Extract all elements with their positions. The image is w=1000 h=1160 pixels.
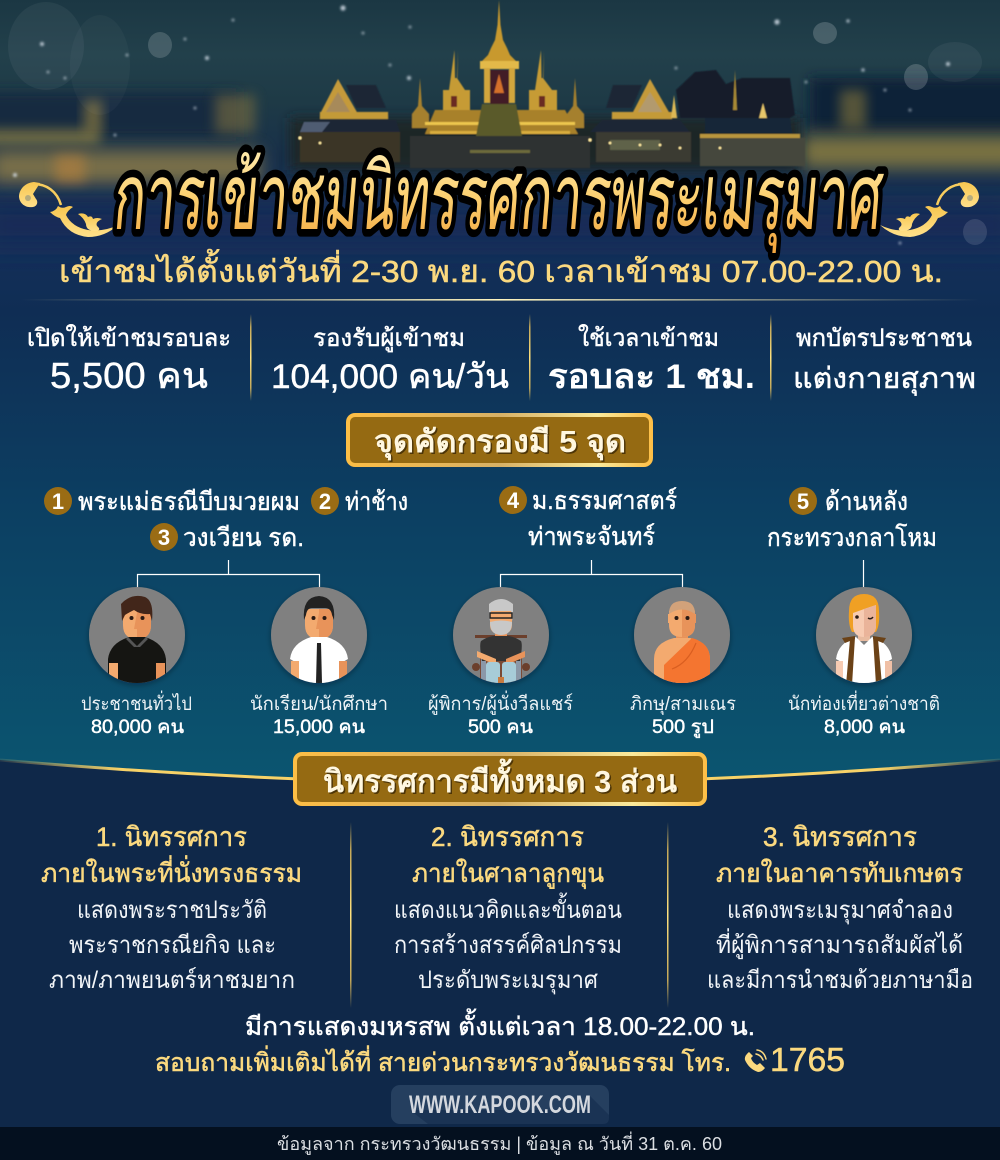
panel: exhibition 1: แสดงพระราชประวัติ	[77, 897, 267, 924]
hotline text: สอบถามเพิ่มเติมได้ที่ สายด่วนกระทรวงวัฒนธรรม โทร.	[155, 1045, 731, 1077]
point 1: 1	[52, 489, 64, 514]
panel: exhibition 2: การสร้างสรรค์ศิลปกรรม	[394, 931, 622, 959]
hotline number: 1765	[770, 1041, 845, 1078]
label: general public: 80,000 คน	[91, 717, 184, 738]
point 4: ม.ธรรมศาสตร์	[532, 487, 677, 515]
person: general public	[89, 587, 185, 685]
blurred riverside glow	[0, 78, 1000, 245]
person: wheelchair user	[453, 587, 549, 685]
point 4: ท่าพระจันทร์	[528, 523, 655, 551]
point 1: พระแม่ธรณีบีบมวยผม	[78, 488, 300, 516]
main spire	[480, 0, 519, 104]
stepped base	[425, 110, 578, 134]
person: monk	[634, 587, 730, 685]
fact: duration: รอบละ 1 ชม.	[548, 358, 755, 396]
lower lights	[298, 136, 721, 149]
footer bar: ข้อมูลจาก กระทรวงวัฒนธรรม | ข้อมูล ณ วันที่ 31 ต.ค. 60	[277, 1131, 722, 1155]
label: monks: 500 รูป	[652, 717, 714, 738]
fact: daily capacity: 104,000 คน/วัน	[271, 358, 509, 396]
right tiered roofs	[676, 70, 795, 118]
connector lines	[138, 560, 864, 587]
label: general public	[81, 690, 192, 738]
panel: exhibition 1: 1. นิทรรศการ	[96, 822, 247, 852]
right hall	[632, 79, 670, 114]
fact: duration	[548, 324, 755, 396]
point 2	[311, 487, 408, 516]
label: students: 15,000 คน	[273, 717, 365, 738]
point 3: วงเวียน รด.	[183, 524, 304, 552]
badge: 5 screening points: จุดคัดกรองมี 5 จุด	[376, 426, 628, 462]
label: monks: ภิกษุ/สามเณร	[630, 694, 736, 716]
divider: header rule	[20, 299, 980, 301]
panel: exhibition 1: พระราชกรณียกิจ และ	[69, 932, 276, 959]
bokeh circles and sparkles	[8, 2, 987, 245]
person: foreign tourist	[816, 587, 912, 685]
panel: exhibition 3: และมีการนำชมด้วยภาษามือ	[707, 967, 973, 994]
icon: telephone	[745, 1050, 766, 1072]
fact: requirements	[793, 325, 976, 396]
panel: exhibition 2: 2. นิทรรศการ	[431, 822, 584, 852]
badge: 3 exhibition parts: นิทรรศการมีทั้งหมด 3 ส่วน	[323, 758, 677, 799]
curved gold line	[0, 760, 1000, 779]
badge: 5 screening points	[346, 413, 653, 467]
fact: daily capacity: รองรับผู้เข้าชม	[313, 325, 465, 353]
label: disabled: 500 คน	[468, 717, 533, 738]
fact: visitors per round: 5,500 คน	[50, 355, 208, 396]
label: disabled: ผู้พิการ/ผู้นั่งวีลแชร์	[428, 690, 573, 715]
fact: daily capacity	[271, 325, 509, 396]
label: students	[250, 693, 388, 738]
evening performance note: มีการแสดงมหรสพ ตั้งแต่เวลา 18.00-22.00 น.	[245, 1008, 755, 1041]
label: monks	[630, 694, 736, 738]
label: disabled	[428, 690, 573, 738]
label: tourists	[788, 690, 940, 738]
panel: exhibition 3	[707, 822, 973, 994]
logo: kapook	[391, 1085, 609, 1124]
footer bar	[0, 1127, 1000, 1160]
badge: 3 exhibition parts: นิทรรศการมีทั้งหมด 3 ส่วน	[324, 760, 678, 800]
side spires	[443, 50, 470, 110]
screening point list	[44, 486, 937, 552]
visitor labels	[81, 690, 940, 738]
point 5: 5	[797, 489, 809, 514]
panel: exhibition 3: 3. นิทรรศการ	[763, 822, 917, 852]
lower panel background	[0, 760, 1000, 1160]
fact: requirements: พกบัตรประชาชน	[796, 325, 972, 352]
fact: requirements: แต่งกายสุภาพ	[793, 363, 976, 396]
logo: kapook: WWW.KAPOOK.COM	[409, 1091, 591, 1119]
point 4: 4	[507, 488, 520, 513]
panel: exhibition 3: แสดงพระเมรุมาศจำลอง	[727, 897, 953, 925]
panel: exhibition 3: ภายในอาคารทับเกษตร	[716, 858, 963, 888]
point 2: ท่าช้าง	[345, 488, 408, 516]
point 2: 2	[319, 489, 331, 514]
point 3: 3	[158, 525, 170, 550]
subtitle: dates and opening hours: เข้าชมได้ตั้งแต่วันที่ 2-30 พ.ย. 60 เวลาเข้าชม 07.00-22.00 น.	[59, 249, 943, 289]
point 5	[767, 487, 937, 552]
palace complex	[290, 0, 805, 170]
point 5: กระทรวงกลาโหม	[767, 523, 937, 552]
fact: visitors per round: เปิดให้เข้าชมรอบละ	[27, 324, 231, 352]
point 4	[499, 486, 677, 551]
label: tourists: 8,000 คน	[824, 717, 905, 738]
label: tourists: นักท่องเที่ยวต่างชาติ	[788, 690, 940, 715]
ornament: right gold scroll	[880, 182, 979, 237]
left hall	[320, 79, 358, 114]
panel: exhibition 1	[41, 822, 302, 994]
panel: exhibition 1: ภายในพระที่นั่งทรงธรรม	[41, 855, 302, 888]
fact: visitors per round	[27, 324, 231, 396]
label: general public: ประชาชนทั่วไป	[81, 690, 192, 715]
background	[0, 0, 1000, 780]
panel: exhibition 3: ที่ผู้พิการสามารถสัมผัสได้	[716, 928, 963, 960]
point 5: ด้านหลัง	[825, 488, 908, 516]
badge: 5 screening points: จุดคัดกรองมี 5 จุด	[374, 424, 626, 461]
fact: duration: ใช้เวลาเข้าชม	[578, 324, 719, 352]
panel: exhibition 2: ประดับพระเมรุมาศ	[418, 967, 598, 995]
badge: 3 exhibition parts	[293, 752, 707, 806]
label: students: นักเรียน/นักศึกษา	[250, 693, 388, 715]
panel: exhibition 2	[394, 822, 622, 995]
panel: exhibition 2: ภายในศาลาลูกขุน	[412, 858, 604, 889]
panel: exhibition 2: แสดงแนวคิดและขั้นตอน	[394, 892, 622, 924]
panel: visiting facts	[27, 314, 976, 401]
person: student	[271, 587, 367, 685]
panel: exhibition 1: ภาพ/ภาพยนตร์หาชมยาก	[49, 966, 295, 994]
ornament: left gold scroll	[19, 182, 118, 237]
photo: palace at night	[0, 0, 1000, 245]
